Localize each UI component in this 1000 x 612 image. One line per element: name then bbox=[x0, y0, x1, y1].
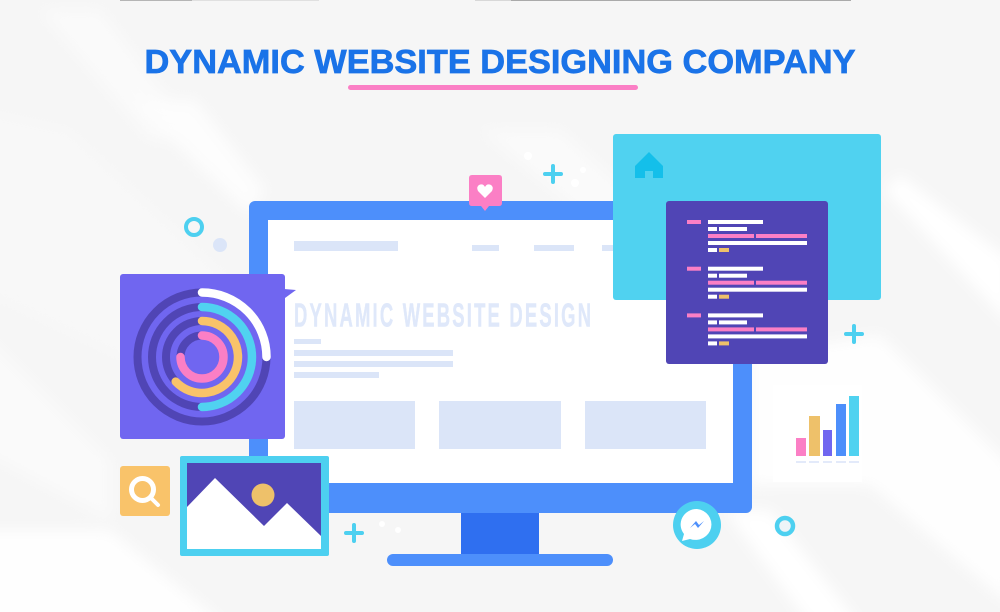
radial chart arcs bbox=[176, 292, 266, 407]
mountains bbox=[187, 478, 321, 549]
icon: heart badge bbox=[469, 175, 502, 211]
paragraph lines bbox=[294, 339, 453, 378]
ring decoration bottom right bbox=[777, 518, 793, 534]
website mockup content bbox=[294, 241, 706, 449]
panel: radial chart bbox=[120, 274, 296, 439]
icon: search bbox=[120, 466, 170, 516]
sun bbox=[252, 484, 274, 506]
code block 1 bbox=[687, 220, 807, 252]
ring decoration top left bbox=[186, 219, 202, 235]
content cards bbox=[294, 401, 706, 449]
site logo bar bbox=[294, 241, 398, 251]
monitor bbox=[249, 201, 752, 566]
code block 3 bbox=[687, 313, 807, 345]
hero heading: DYNAMIC WEBSITE DESIGN bbox=[294, 297, 591, 334]
bar labels bbox=[796, 461, 859, 463]
plus top bbox=[545, 166, 561, 182]
top edge artefact lines bbox=[120, 0, 851, 1]
icon: messenger bbox=[673, 501, 721, 549]
nav items bbox=[472, 245, 616, 251]
panel: code editor bbox=[666, 201, 828, 364]
monitor stand bbox=[461, 510, 539, 556]
icon: home bbox=[635, 152, 663, 178]
sparkle dots bbox=[379, 152, 586, 533]
plus bottom bbox=[346, 525, 362, 541]
monitor screen bbox=[268, 220, 733, 483]
radial chart tracks bbox=[138, 292, 266, 422]
plus right bbox=[846, 326, 862, 342]
image card bbox=[180, 456, 329, 556]
code block 2 bbox=[687, 267, 807, 299]
monitor frame bbox=[249, 201, 752, 513]
bars bbox=[796, 396, 859, 456]
monitor base bbox=[387, 554, 613, 566]
panel: bar chart bbox=[773, 385, 862, 482]
dot decoration bbox=[213, 238, 227, 252]
panel: home window bbox=[613, 134, 881, 300]
title: DYNAMIC WEBSITE DESIGNING COMPANY bbox=[144, 44, 856, 81]
title underline bbox=[348, 85, 638, 90]
